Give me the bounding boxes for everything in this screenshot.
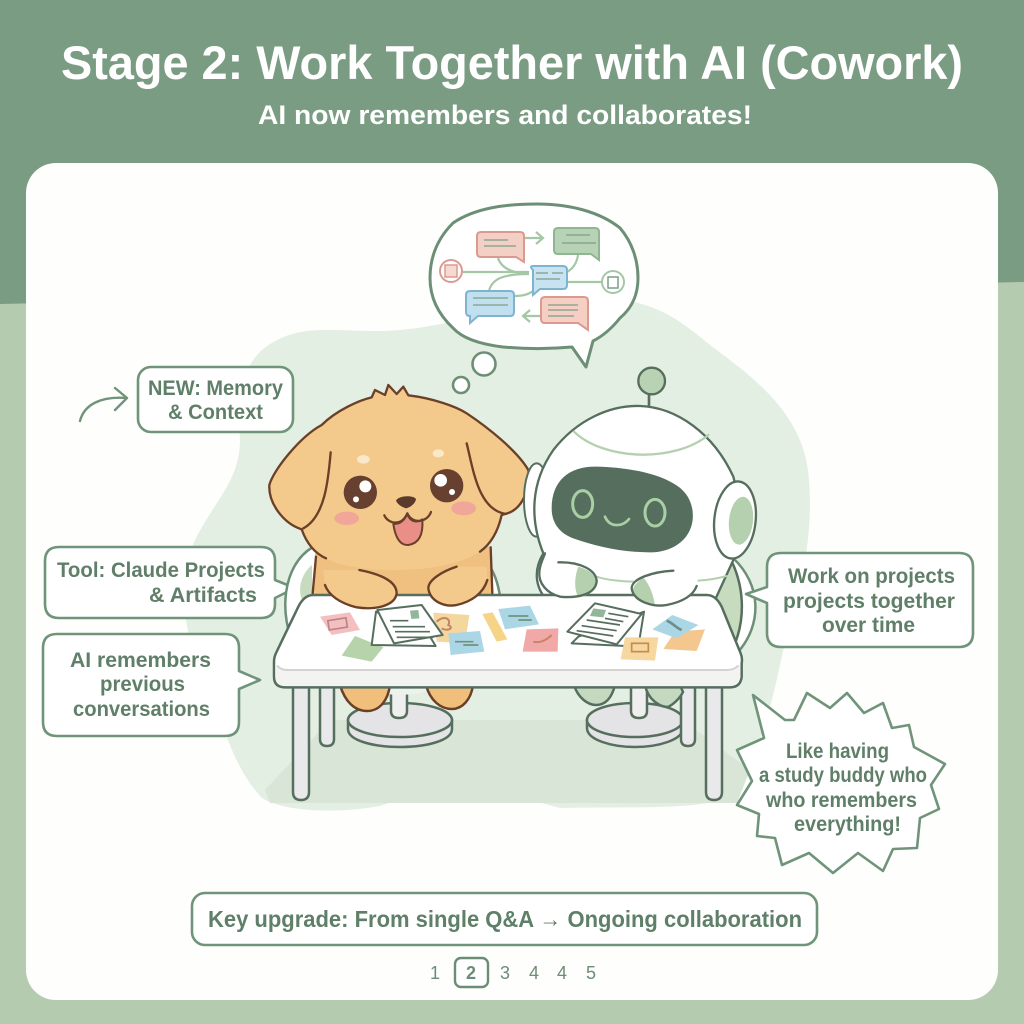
right documents — [567, 603, 644, 647]
current stage marker — [455, 958, 488, 987]
left blue message icon — [466, 291, 514, 323]
dog body side lines — [313, 547, 492, 593]
dog nose — [396, 496, 416, 508]
robot head band — [574, 432, 708, 455]
papers and sticky notes on table — [320, 603, 705, 662]
subtitle: AI now remembers and collaborates! — [258, 100, 752, 130]
red message icon — [477, 232, 524, 262]
title: Stage 2: Work Together with AI (Cowork) — [61, 36, 963, 89]
character: dog — [269, 385, 529, 600]
dog eyes — [344, 469, 463, 509]
left chair base — [348, 685, 452, 747]
dog head fill — [269, 385, 529, 570]
robot antenna — [638, 368, 665, 407]
dog head outline — [269, 385, 529, 558]
dog left paw outline — [325, 570, 397, 608]
dog and robot arms resting on table — [323, 553, 697, 608]
robot smile — [605, 517, 629, 525]
red circle icon — [440, 260, 462, 282]
callout: new memory and context: & Context — [168, 401, 263, 424]
dog right paw — [428, 567, 487, 606]
green message icon — [554, 228, 599, 260]
callout: AI remembers: AI remembers — [70, 649, 211, 672]
callout: AI remembers — [43, 634, 260, 736]
callout: tool: & Artifacts — [149, 584, 257, 607]
robot chair — [700, 558, 755, 652]
robot left arm — [539, 553, 597, 597]
dog mouth — [384, 512, 431, 523]
robot visor — [552, 467, 693, 552]
bubble trail small circle — [453, 377, 469, 393]
burst callout: study buddy: a study buddy who — [759, 764, 927, 787]
robot eyes — [573, 491, 665, 526]
dog feet — [340, 685, 473, 711]
callout: AI remembers: previous — [100, 673, 185, 696]
table legs — [293, 685, 722, 800]
stage pagination: 1 — [430, 963, 440, 983]
burst callout: study buddy — [737, 693, 945, 873]
callout: work on projects: projects together — [783, 590, 955, 613]
stage pagination: 5 — [586, 963, 596, 983]
background: dark green header band — [0, 0, 1024, 304]
dog left ear line — [303, 452, 331, 528]
main white card — [26, 163, 998, 1000]
right chair base — [587, 685, 683, 747]
dog right paw outline — [428, 567, 487, 606]
dog chair — [285, 547, 502, 650]
sticky notes left — [320, 612, 469, 662]
callout: tool — [45, 547, 295, 618]
sticky notes middle — [437, 606, 558, 655]
burst callout: study buddy: Like having — [786, 740, 889, 763]
thought bubble — [430, 204, 638, 393]
message text lines — [473, 235, 596, 316]
right red message icon — [541, 297, 588, 330]
green circle icon — [602, 271, 624, 293]
dog left paw — [323, 570, 397, 608]
dog tongue — [393, 514, 422, 545]
flow diagram connectors — [463, 232, 603, 322]
table top surface — [274, 595, 742, 687]
key upgrade banner: Key upgrade: From single Q&A → Ongoing collaboration — [208, 906, 802, 932]
callout: AI remembers: conversations — [73, 698, 210, 721]
floor shadow under table — [265, 720, 750, 803]
table surface and edge — [274, 595, 742, 687]
pale green background blob — [184, 298, 810, 811]
robot body — [534, 406, 738, 600]
table edge line — [277, 665, 738, 670]
callout: work on projects — [746, 553, 973, 647]
key upgrade banner — [192, 893, 817, 945]
dog body — [313, 547, 492, 600]
callout: work on projects: over time — [822, 614, 915, 637]
stage pagination — [430, 958, 596, 987]
robot right headphone — [710, 479, 760, 561]
stage pagination: 3 — [500, 963, 510, 983]
arrow to memory callout — [80, 388, 127, 421]
sticky notes right — [328, 615, 705, 661]
left documents — [372, 605, 443, 646]
callout: work on projects: Work on projects — [788, 565, 955, 588]
robot belly band — [597, 576, 727, 582]
centre blue message icon — [531, 266, 567, 295]
dog right ear line — [467, 443, 506, 514]
bubble outline — [430, 204, 638, 367]
stage pagination: 4 — [529, 963, 539, 983]
robot right arm — [632, 571, 697, 606]
dog cheeks — [334, 501, 476, 525]
robot left headphone — [524, 463, 549, 537]
burst callout: study buddy: everything! — [794, 813, 901, 836]
table front shade — [275, 664, 740, 686]
bubble trail large circle — [472, 352, 496, 376]
burst callout: study buddy: who remembers — [765, 789, 917, 812]
dog eyebrows — [357, 449, 444, 464]
callout: new memory and context — [138, 367, 293, 432]
callout: new memory and context: NEW: Memory — [148, 377, 283, 400]
stage pagination: 2 — [466, 963, 476, 983]
callout: tool: Tool: Claude Projects — [57, 559, 265, 582]
character: robot — [524, 368, 760, 600]
stage pagination: 4 — [557, 963, 567, 983]
robot feet — [574, 685, 683, 707]
